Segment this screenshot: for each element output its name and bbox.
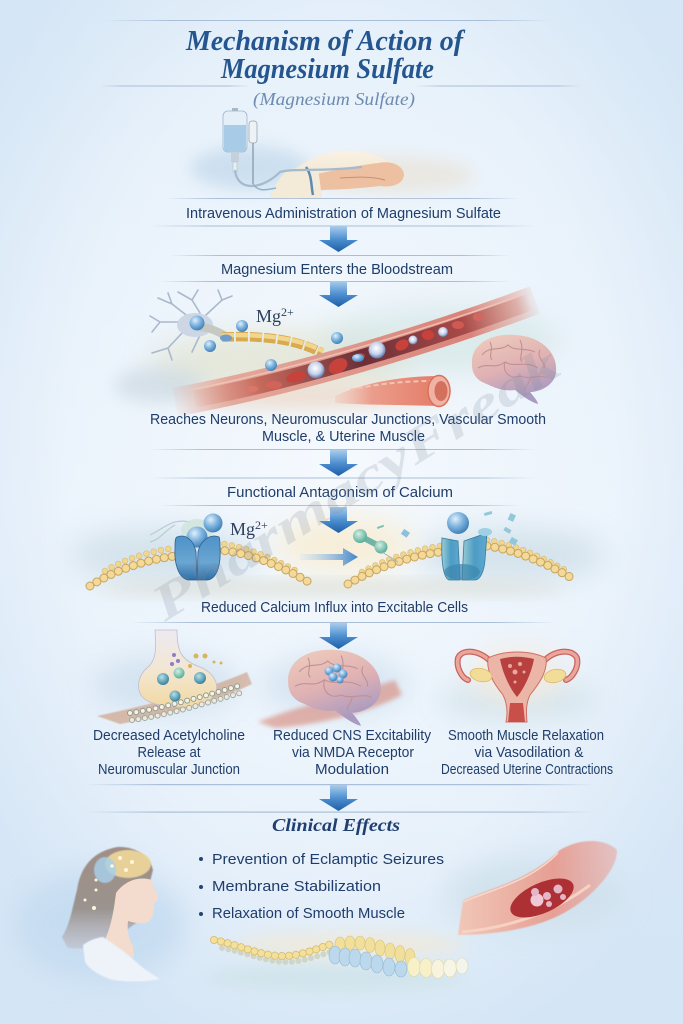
icon: neuron bbox=[150, 290, 232, 360]
step: intravenous administration: Intravenous Administration of Magnesium Sulfate bbox=[186, 205, 501, 222]
shoulder garment bbox=[83, 937, 160, 981]
label: Mg2+: 2+ bbox=[255, 518, 268, 532]
illustration: calcium channel blockade bbox=[70, 511, 605, 594]
open calcium channel bbox=[377, 511, 518, 580]
text: CNS column: via NMDA Receptor bbox=[292, 744, 414, 761]
blood vessel bbox=[175, 296, 535, 402]
clinical effects list: Membrane Stabilization bbox=[212, 878, 381, 895]
nerve terminal bbox=[139, 630, 222, 707]
illustration: bloodstream distribution bbox=[115, 290, 560, 408]
clinical effects list bbox=[199, 851, 444, 922]
step: magnesium enters the bloodstream: Magnesium Enters the Bloodstream bbox=[221, 261, 453, 278]
icon: forearm and hand bbox=[235, 151, 404, 198]
arrow 5 bbox=[319, 623, 358, 649]
membrane right bbox=[348, 540, 575, 584]
step: reaches target tissues: Reaches Neurons, Neuromuscular Junctions, Vascular Smooth bbox=[150, 411, 546, 428]
face and neck bbox=[104, 879, 158, 958]
icon: IV bag bbox=[223, 108, 257, 184]
label: Mg2+: Mg bbox=[230, 519, 255, 539]
clinical effects list: Prevention of Eclamptic Seizures bbox=[212, 851, 444, 868]
icon: brain bbox=[472, 335, 556, 404]
step: reduced calcium influx: Reduced Calcium Influx into Excitable Cells bbox=[201, 599, 468, 616]
magnesium ions bbox=[190, 316, 343, 371]
subtitle: (Magnesium Sulfate) bbox=[253, 89, 415, 110]
title: Mechanism of Action of bbox=[185, 25, 466, 57]
illustration: dilated vessel bbox=[445, 841, 625, 935]
title bbox=[185, 25, 466, 85]
arrow 4 bbox=[319, 507, 358, 533]
text: acetylcholine column: Decreased Acetylcholine bbox=[93, 727, 245, 744]
illustration: woman with calm brain bbox=[15, 847, 185, 981]
text: smooth muscle column: Decreased Uterine Contractions bbox=[441, 761, 613, 778]
illustration: stabilised membrane bbox=[205, 933, 468, 992]
step: functional antagonism: Functional Antagonism of Calcium bbox=[227, 484, 453, 501]
panel: acetylcholine release bbox=[90, 630, 252, 724]
NMDA receptor cluster bbox=[324, 664, 348, 684]
step: reaches target tissues: Muscle, & Uterine Muscle bbox=[262, 428, 425, 445]
title: Magnesium Sulfate bbox=[220, 53, 434, 85]
arrow 1 bbox=[319, 226, 358, 252]
receptor strip bbox=[130, 686, 240, 720]
panel: uterus bbox=[438, 650, 598, 722]
illustration: IV infusion into arm bbox=[190, 108, 475, 198]
text: CNS column: Reduced CNS Excitability bbox=[273, 727, 431, 744]
text: smooth muscle column: Smooth Muscle Relaxation bbox=[448, 727, 604, 744]
hair bbox=[62, 847, 153, 949]
clinical effects list: Relaxation of Smooth Muscle bbox=[212, 905, 405, 922]
label: Mg2+: 2+ bbox=[281, 305, 294, 319]
muscle band bbox=[97, 672, 252, 724]
text: smooth muscle column: via Vasodilation & bbox=[474, 744, 584, 761]
heading: clinical effects: Clinical Effects bbox=[272, 815, 400, 835]
step: reaches target tissues bbox=[150, 411, 546, 445]
membrane left bbox=[90, 543, 312, 586]
text: CNS column bbox=[273, 727, 431, 778]
label: Mg2+: Mg bbox=[256, 306, 281, 326]
tissue band bbox=[258, 680, 402, 728]
axon with myelin beads bbox=[222, 335, 323, 353]
arrow 2 bbox=[319, 281, 358, 307]
blocked calcium channel bbox=[150, 514, 222, 580]
smooth muscle tube bbox=[335, 376, 450, 406]
molecule bbox=[353, 529, 410, 562]
panel: CNS excitability bbox=[258, 650, 410, 728]
text: acetylcholine column: Neuromuscular Junction bbox=[98, 761, 240, 778]
arrow: to open channel bbox=[300, 548, 358, 566]
watermark: PharmacyFreak bbox=[140, 335, 569, 632]
text: smooth muscle column bbox=[441, 727, 613, 778]
arrow 3 bbox=[319, 450, 358, 476]
glowing brain bbox=[84, 850, 151, 910]
arrow 6 bbox=[319, 785, 358, 811]
text: acetylcholine column bbox=[93, 727, 245, 778]
icon: uterus bbox=[458, 652, 577, 722]
clot opening bbox=[505, 870, 579, 926]
text: acetylcholine column: Release at bbox=[138, 744, 201, 761]
icon: brain bbox=[288, 650, 381, 726]
text: CNS column: Modulation bbox=[315, 761, 389, 778]
